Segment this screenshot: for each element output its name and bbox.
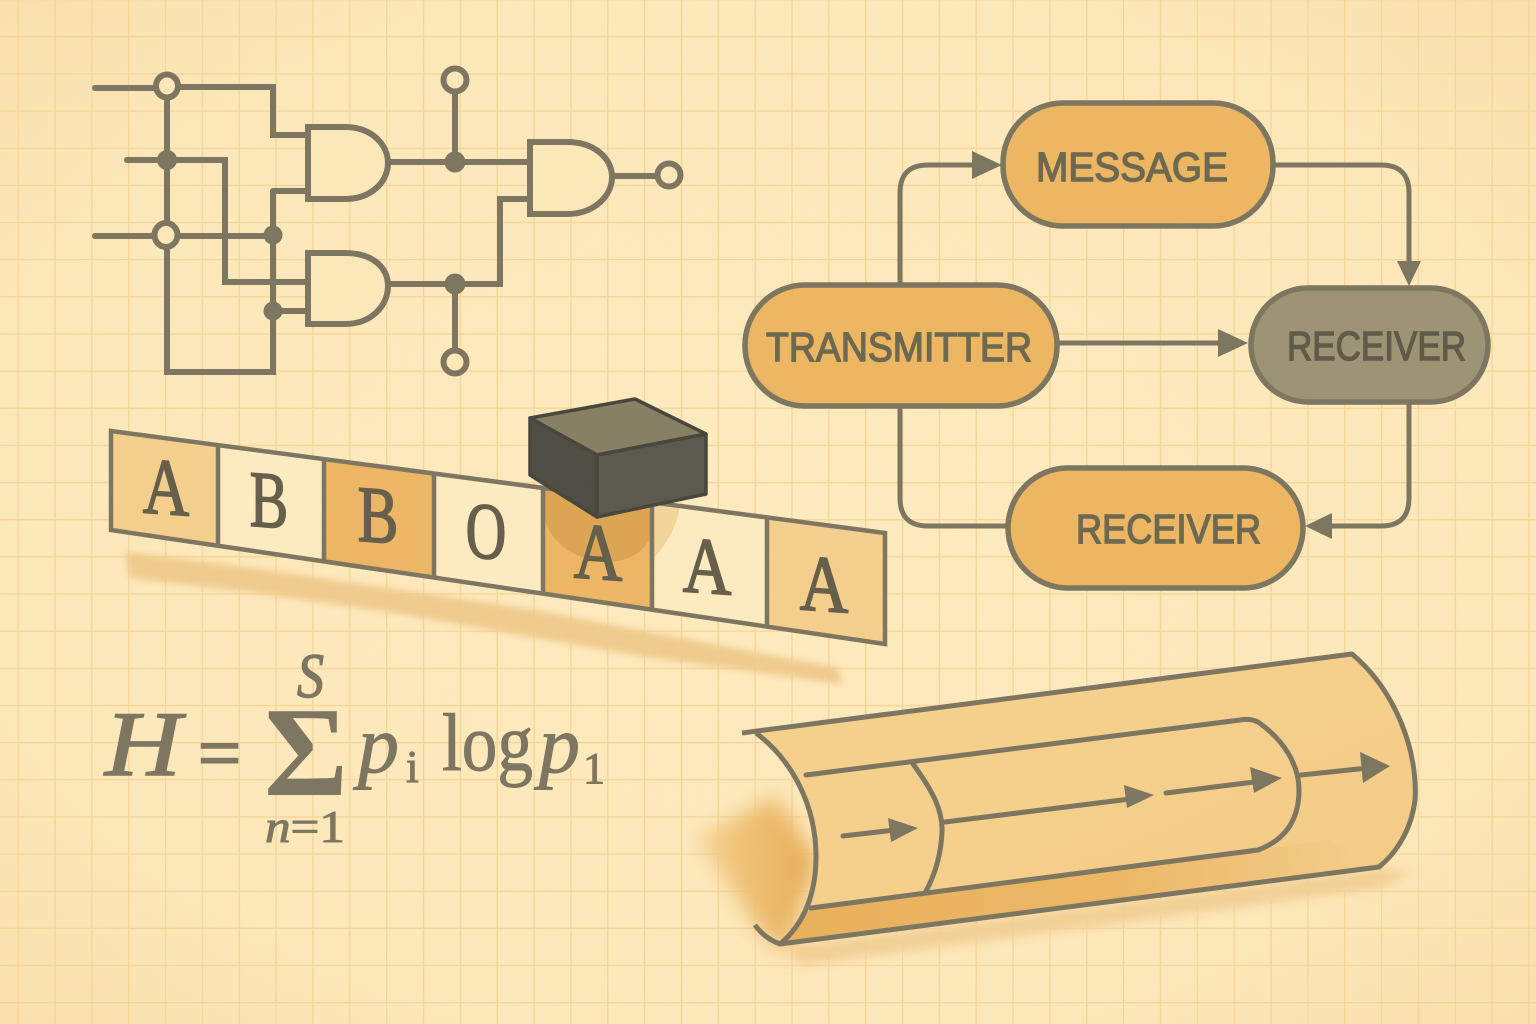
inner section [806, 719, 1299, 908]
ground shadow [785, 868, 1410, 966]
node: transmitter [745, 285, 1057, 406]
entropy formula: H [104, 693, 186, 795]
node: message [1003, 103, 1273, 226]
summation symbol: Σ [264, 681, 348, 823]
rolled paper tube [698, 654, 1415, 966]
node: receiver grey: RECEIVER [1287, 323, 1466, 369]
head shadow [545, 490, 680, 562]
tape symbols: O [466, 485, 506, 577]
tape outline [111, 431, 885, 644]
log: log [442, 697, 533, 788]
read/write head cube [530, 399, 706, 517]
tube outlines [742, 654, 1415, 944]
p sub i [353, 699, 419, 792]
wires: inputs and feedback [95, 87, 308, 372]
node: transmitter: TRANSMITTER [766, 324, 1032, 370]
tape symbols: A [574, 506, 622, 598]
solder nodes [157, 150, 466, 320]
lower limit: n=1 [265, 801, 345, 852]
connectors [900, 165, 1409, 526]
tape cells [111, 431, 885, 644]
flow diagram [745, 103, 1488, 588]
p sub i: p [353, 699, 399, 790]
tape symbols: A [800, 538, 848, 630]
equals sign: = [198, 713, 241, 795]
node: message: MESSAGE [1036, 144, 1228, 190]
tape symbols: B [250, 456, 288, 547]
upper limit: S [297, 640, 324, 711]
p sub 1: p [534, 699, 580, 790]
tape symbols: A [143, 441, 189, 533]
node: receiver grey [1251, 288, 1488, 402]
node: receiver lower [1008, 468, 1303, 588]
node: receiver lower: RECEIVER [1076, 506, 1261, 552]
p sub 1 [534, 699, 605, 793]
tape shadow [125, 552, 842, 684]
p sub i: i [406, 741, 419, 792]
tape with head [111, 399, 885, 684]
flow arrows [843, 752, 1390, 842]
lower band [788, 846, 1291, 940]
gate: output NAND [530, 142, 612, 214]
tape symbols: B [358, 471, 398, 561]
gate: upper AND [308, 127, 388, 199]
tube body [758, 654, 1415, 944]
logic gate circuit [95, 68, 680, 374]
p sub 1: 1 [583, 744, 605, 793]
wires: outputs [388, 92, 657, 350]
gate: lower AND [308, 253, 388, 324]
arrowheads [972, 151, 1421, 539]
tube interior shadow [698, 796, 818, 955]
entropy formula [104, 640, 605, 852]
tape symbols: A [683, 520, 731, 612]
tape symbols [143, 441, 848, 630]
open terminals [154, 68, 680, 374]
